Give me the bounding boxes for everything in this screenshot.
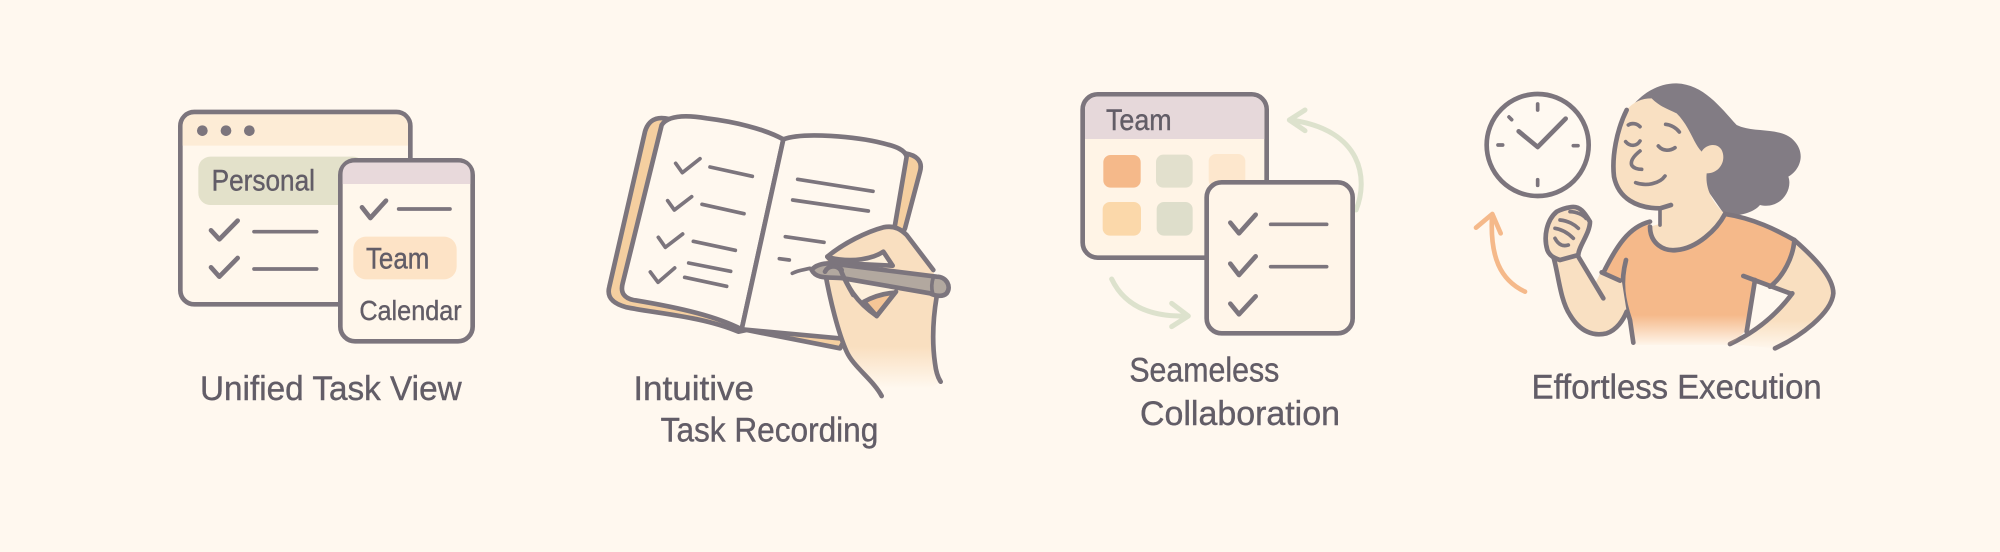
icon: team board: Team — [1106, 104, 1172, 137]
arrow: return to team board — [1289, 110, 1361, 210]
arrow: upward orange — [1476, 214, 1525, 292]
icon: phone — [340, 160, 473, 341]
icon: clock — [1487, 94, 1589, 196]
icon: phone: Calendar — [359, 295, 462, 326]
heading: effortless execution: Effortless Execution — [1532, 368, 1822, 406]
icon: desktop window: Personal — [212, 165, 315, 198]
left arm and fist — [1553, 257, 1627, 334]
heading: intuitive task recording — [633, 370, 878, 450]
panel: effortless execution — [1476, 83, 1833, 406]
icon: hand holding pen — [812, 227, 949, 396]
illustration: woman relaxing — [1546, 83, 1833, 348]
right arm — [1730, 240, 1833, 348]
heading: seamless collaboration: Seameless — [1129, 352, 1279, 390]
heading: seamless collaboration: Collaboration — [1140, 395, 1340, 433]
panel: intuitive task recording — [609, 116, 949, 450]
heading: seamless collaboration — [1129, 352, 1340, 433]
icon: team board — [1083, 94, 1267, 258]
arrow: to checklist — [1112, 279, 1188, 327]
heading: intuitive task recording: Task Recording — [661, 412, 878, 450]
panel: seamless collaboration — [1083, 94, 1361, 433]
panel: unified task view — [180, 112, 473, 408]
face and neck — [1613, 98, 1725, 250]
icon: open notebook — [609, 116, 921, 348]
heading: intuitive task recording: Intuitive — [633, 370, 754, 408]
icon: phone: Team — [366, 242, 429, 275]
facial features — [1626, 124, 1679, 184]
torso shirt — [1602, 214, 1794, 345]
hair — [1618, 83, 1801, 216]
heading: unified task view: Unified Task View — [200, 370, 462, 408]
icon: desktop window — [180, 112, 410, 304]
icon: checklist card — [1207, 182, 1353, 333]
